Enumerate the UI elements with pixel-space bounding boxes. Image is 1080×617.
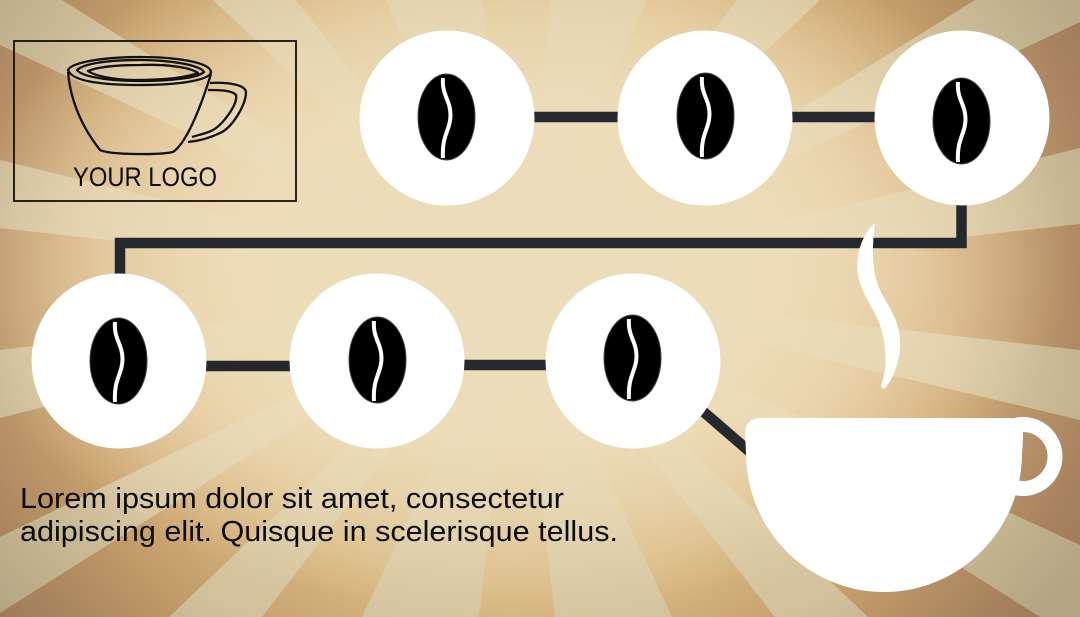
icon: logo cup outline [68, 57, 246, 154]
step 6: coffee bean circle [546, 274, 720, 448]
text block: Lorem ipsum dolor sit amet, consectetur [20, 483, 564, 515]
text block: adipiscing elit. Quisque in scelerisque tellus. [20, 516, 618, 548]
icon: steam [857, 223, 900, 389]
icon: white coffee cup [745, 418, 1055, 592]
step 2: coffee bean circle [618, 30, 792, 206]
logo placeholder [14, 41, 296, 201]
step 5: coffee bean circle [290, 274, 464, 448]
step 3: coffee bean circle [874, 30, 1050, 206]
connector path between beans [120, 117, 962, 452]
logo label: YOUR LOGO [73, 162, 217, 192]
step 1: coffee bean circle [360, 30, 534, 206]
step 4: coffee bean circle [32, 274, 206, 448]
text block [20, 483, 618, 548]
